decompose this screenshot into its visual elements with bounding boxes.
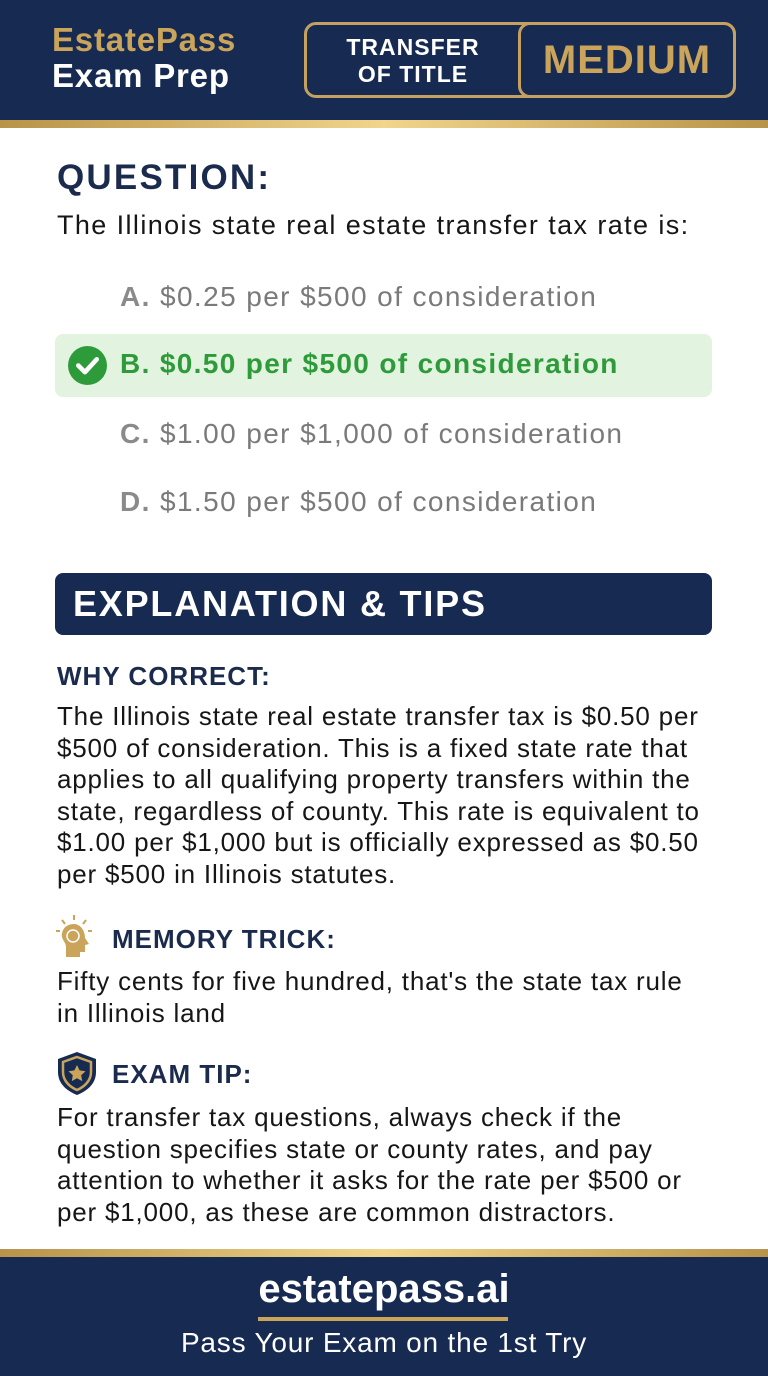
memory trick heading: MEMORY TRICK:	[112, 924, 336, 954]
why correct text: state, regardless of county. This rate is equivalent to	[57, 796, 700, 826]
why correct text: $500 of consideration. This is a fixed state rate that	[57, 733, 688, 763]
icon: shield	[58, 1052, 96, 1095]
why correct text: The Illinois state real estate transfer tax is $0.50 per	[57, 701, 699, 731]
option B correct	[55, 334, 712, 397]
why correct text: applies to all qualifying property transfers within the	[57, 764, 691, 794]
why correct text: $1.00 per $1,000 but is officially expressed as $0.50	[57, 827, 699, 857]
option D: D. $1.50 per $500 of consideration	[120, 486, 597, 517]
exam tip text: per $1,000, as these are common distractors.	[57, 1197, 615, 1227]
memory trick text	[57, 966, 683, 1028]
footer	[0, 1249, 768, 1376]
exam tip text: question specifies state or county rates, and pay	[57, 1134, 653, 1164]
option B correct: B. $0.50 per $500 of consideration	[120, 348, 619, 379]
topic	[346, 34, 480, 87]
icon: check	[68, 346, 107, 385]
exam tip text: attention to whether it asks for the rate per $500 or	[57, 1165, 682, 1195]
option A: A. $0.25 per $500 of consideration	[120, 281, 597, 312]
difficulty: MEDIUM	[543, 38, 711, 82]
logo text	[52, 21, 236, 94]
why correct heading: WHY CORRECT:	[57, 661, 271, 691]
option C: C. $1.00 per $1,000 of consideration	[120, 418, 623, 449]
logo text: EstatePass	[52, 21, 236, 58]
footer tagline: Pass Your Exam on the 1st Try	[181, 1327, 587, 1358]
explanation banner	[55, 573, 712, 635]
topic: OF TITLE	[358, 61, 468, 87]
exam tip text	[57, 1102, 682, 1227]
logo text: Exam Prep	[52, 57, 230, 94]
memory trick text: in Illinois land	[57, 998, 226, 1028]
question text: The Illinois state real estate transfer tax rate is:	[57, 210, 690, 240]
header	[0, 0, 768, 128]
icon: lightbulb head	[56, 915, 92, 957]
badge: topic and difficulty	[304, 22, 736, 98]
exam tip text: For transfer tax questions, always check if the	[57, 1102, 622, 1132]
difficulty	[518, 22, 736, 98]
explanation banner: EXPLANATION & TIPS	[73, 583, 487, 624]
memory trick text: Fifty cents for five hundred, that's the state tax rule	[57, 966, 683, 996]
footer site name: estatepass.ai	[258, 1267, 510, 1311]
why correct text	[57, 701, 700, 889]
question heading: QUESTION:	[57, 158, 271, 197]
why correct text: per $500 in Illinois statutes.	[57, 859, 396, 889]
exam tip heading: EXAM TIP:	[112, 1059, 252, 1089]
topic: TRANSFER	[346, 34, 480, 60]
